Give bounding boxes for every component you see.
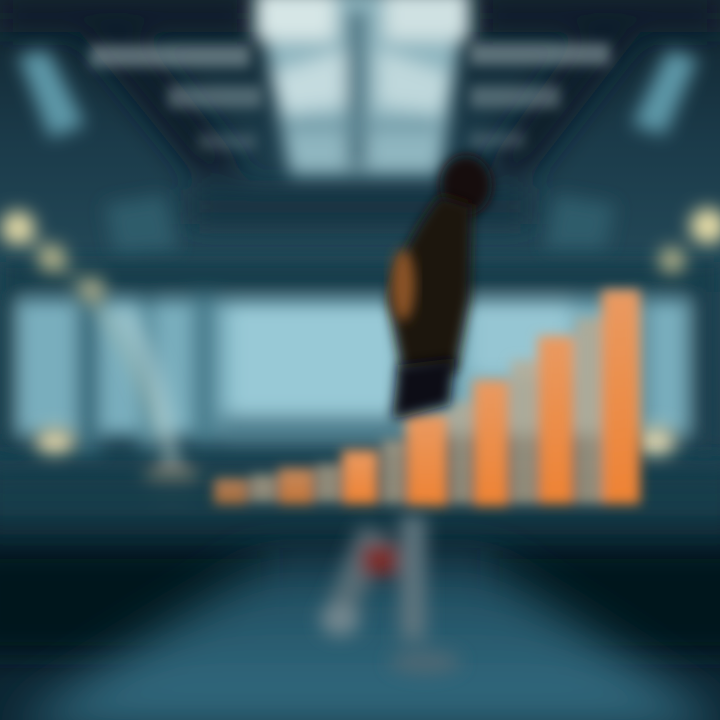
torso	[388, 195, 472, 372]
heading: illegible blurred text right	[470, 43, 610, 148]
figure: silhouette of a person	[320, 155, 492, 674]
side skylights	[18, 50, 698, 255]
arc of lights left	[1, 211, 200, 499]
bars: pale alternates	[250, 318, 602, 504]
windows: bright wall band	[0, 262, 720, 455]
head	[440, 155, 492, 215]
floor	[10, 565, 720, 720]
heading: illegible blurred text left	[90, 45, 262, 150]
arc of lights right	[636, 208, 720, 458]
skylight	[255, 0, 470, 175]
lower hall dark band	[0, 470, 720, 655]
roof: dark ceiling trusses	[0, 0, 720, 224]
shorts	[392, 358, 455, 420]
chest shading	[391, 249, 415, 321]
legs	[320, 515, 461, 674]
bars: orange series	[214, 290, 640, 506]
bar chart	[214, 290, 640, 506]
